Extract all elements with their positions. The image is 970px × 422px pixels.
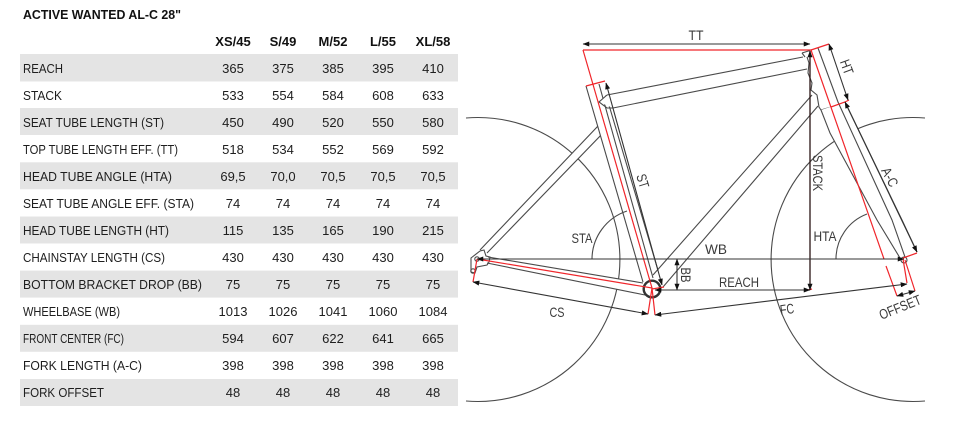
table row labels: REACH (23, 61, 63, 76)
table values: 518 (222, 142, 244, 157)
table row labels: FORK LENGTH (A-C) (23, 358, 142, 373)
dimension labels: OFFSET (877, 291, 924, 323)
table values: 375 (272, 61, 294, 76)
table values: 430 (272, 250, 294, 265)
table values: 165 (322, 223, 344, 238)
table values: 1060 (369, 304, 397, 319)
dimension: angle arcs STA and HTA (592, 211, 867, 259)
table values: 48 (276, 385, 290, 400)
table values: 135 (272, 223, 294, 238)
table values: 410 (422, 61, 444, 76)
frame: head tube lug (802, 50, 831, 110)
table values: 398 (272, 358, 294, 373)
dimension labels: A-C (878, 164, 902, 190)
table header row: sizes: S/49 (270, 34, 296, 49)
table values: 607 (272, 331, 294, 346)
table values: 70,5 (320, 169, 346, 184)
table values: 70,5 (370, 169, 396, 184)
table values: 74 (426, 196, 440, 211)
table values: 75 (276, 277, 290, 292)
table values: 633 (422, 88, 444, 103)
table values: 385 (322, 61, 344, 76)
dimension labels: ST (633, 172, 653, 190)
table header row: sizes: M/52 (319, 34, 347, 49)
dimension labels: CS (550, 304, 564, 320)
table values: 608 (372, 88, 394, 103)
frame: down tube (653, 95, 818, 287)
table values: 115 (223, 223, 243, 238)
table row labels: STACK (23, 88, 62, 103)
table row labels: SEAT TUBE LENGTH (ST) (23, 115, 164, 130)
dimension labels: STACK (810, 155, 826, 192)
table values: 398 (322, 358, 344, 373)
table values: 395 (372, 61, 394, 76)
table row labels: HEAD TUBE LENGTH (HT) (23, 223, 169, 238)
table values: 398 (372, 358, 394, 373)
table values: 490 (272, 115, 294, 130)
frame: seat stay (480, 125, 603, 253)
frame: fork (818, 48, 917, 258)
table values: 534 (272, 142, 294, 157)
table values: 430 (322, 250, 344, 265)
frame: bottom bracket (644, 281, 660, 297)
frame: top tube (599, 57, 807, 108)
table values: 1026 (269, 304, 297, 319)
table values: 75 (326, 277, 340, 292)
front wheel arc (771, 118, 925, 402)
dimension labels: STA (572, 230, 593, 246)
table values: 48 (226, 385, 240, 400)
table values: 74 (226, 196, 240, 211)
front axle (901, 257, 907, 263)
table values (219, 61, 447, 400)
table values: 622 (322, 331, 344, 346)
table values: 533 (222, 88, 244, 103)
table row labels (23, 61, 202, 400)
table values: 594 (222, 331, 244, 346)
table values: 430 (422, 250, 444, 265)
table values: 450 (222, 115, 244, 130)
table title: ACTIVE WANTED AL-C 28" (23, 7, 181, 22)
table values: 592 (422, 142, 444, 157)
table header row: sizes: XS/45 (215, 34, 251, 49)
table values: 215 (422, 223, 444, 238)
dimension labels: HTA (814, 228, 837, 244)
bike geometry diagram (466, 27, 925, 402)
table values: 48 (326, 385, 340, 400)
table row labels: WHEELBASE (WB) (23, 304, 120, 319)
table values: 74 (376, 196, 390, 211)
table values: 70,0 (270, 169, 296, 184)
table values: 552 (322, 142, 344, 157)
dimension labels: TT (688, 27, 704, 43)
table row labels: BOTTOM BRACKET DROP (BB) (23, 277, 202, 292)
table values: 74 (326, 196, 340, 211)
table values: 398 (422, 358, 444, 373)
dimension labels: WB (705, 241, 727, 257)
table values: 520 (322, 115, 344, 130)
table row labels: SEAT TUBE ANGLE EFF. (STA) (23, 196, 194, 211)
table row labels: FORK OFFSET (23, 385, 104, 400)
table header row: sizes: L/55 (370, 34, 396, 49)
table values: 48 (426, 385, 440, 400)
table values: 75 (426, 277, 440, 292)
table values: 584 (322, 88, 344, 103)
table values: 550 (372, 115, 394, 130)
dimension labels: HT (837, 57, 857, 77)
table values: 74 (276, 196, 290, 211)
table header row: sizes (215, 34, 450, 49)
table values: 554 (272, 88, 294, 103)
rear wheel arc (466, 118, 620, 402)
red geometry lines (473, 44, 917, 315)
table values: 75 (376, 277, 390, 292)
table row labels: HEAD TUBE ANGLE (HTA) (23, 169, 172, 184)
table values: 75 (226, 277, 240, 292)
table row labels: TOP TUBE LENGTH EFF. (TT) (23, 142, 178, 157)
table row bands (20, 54, 458, 406)
dimension labels (550, 27, 924, 323)
table values: 641 (372, 331, 394, 346)
table values: 365 (222, 61, 244, 76)
dimension arrows (473, 44, 917, 315)
table values: 1013 (219, 304, 247, 319)
frame: seat tube (586, 81, 662, 282)
dimension labels: FC (779, 300, 795, 318)
table values: 1084 (419, 304, 447, 319)
table header row: sizes: XL/58 (416, 34, 450, 49)
table row labels: CHAINSTAY LENGTH (CS) (23, 250, 165, 265)
table values: 1041 (319, 304, 347, 319)
table values: 580 (422, 115, 444, 130)
table values: 48 (376, 385, 390, 400)
frame: rear dropout (471, 250, 490, 273)
table values: 665 (422, 331, 444, 346)
dimension labels: BB (678, 268, 694, 282)
table values: 430 (372, 250, 394, 265)
frame: chainstay (487, 257, 645, 295)
table values: 190 (372, 223, 394, 238)
table values: 70,5 (420, 169, 446, 184)
dimension labels: REACH (719, 274, 759, 290)
table values: 569 (372, 142, 394, 157)
table values: 69,5 (220, 169, 246, 184)
table row labels: FRONT CENTER (FC) (23, 331, 124, 346)
table values: 430 (222, 250, 244, 265)
table values: 398 (222, 358, 244, 373)
